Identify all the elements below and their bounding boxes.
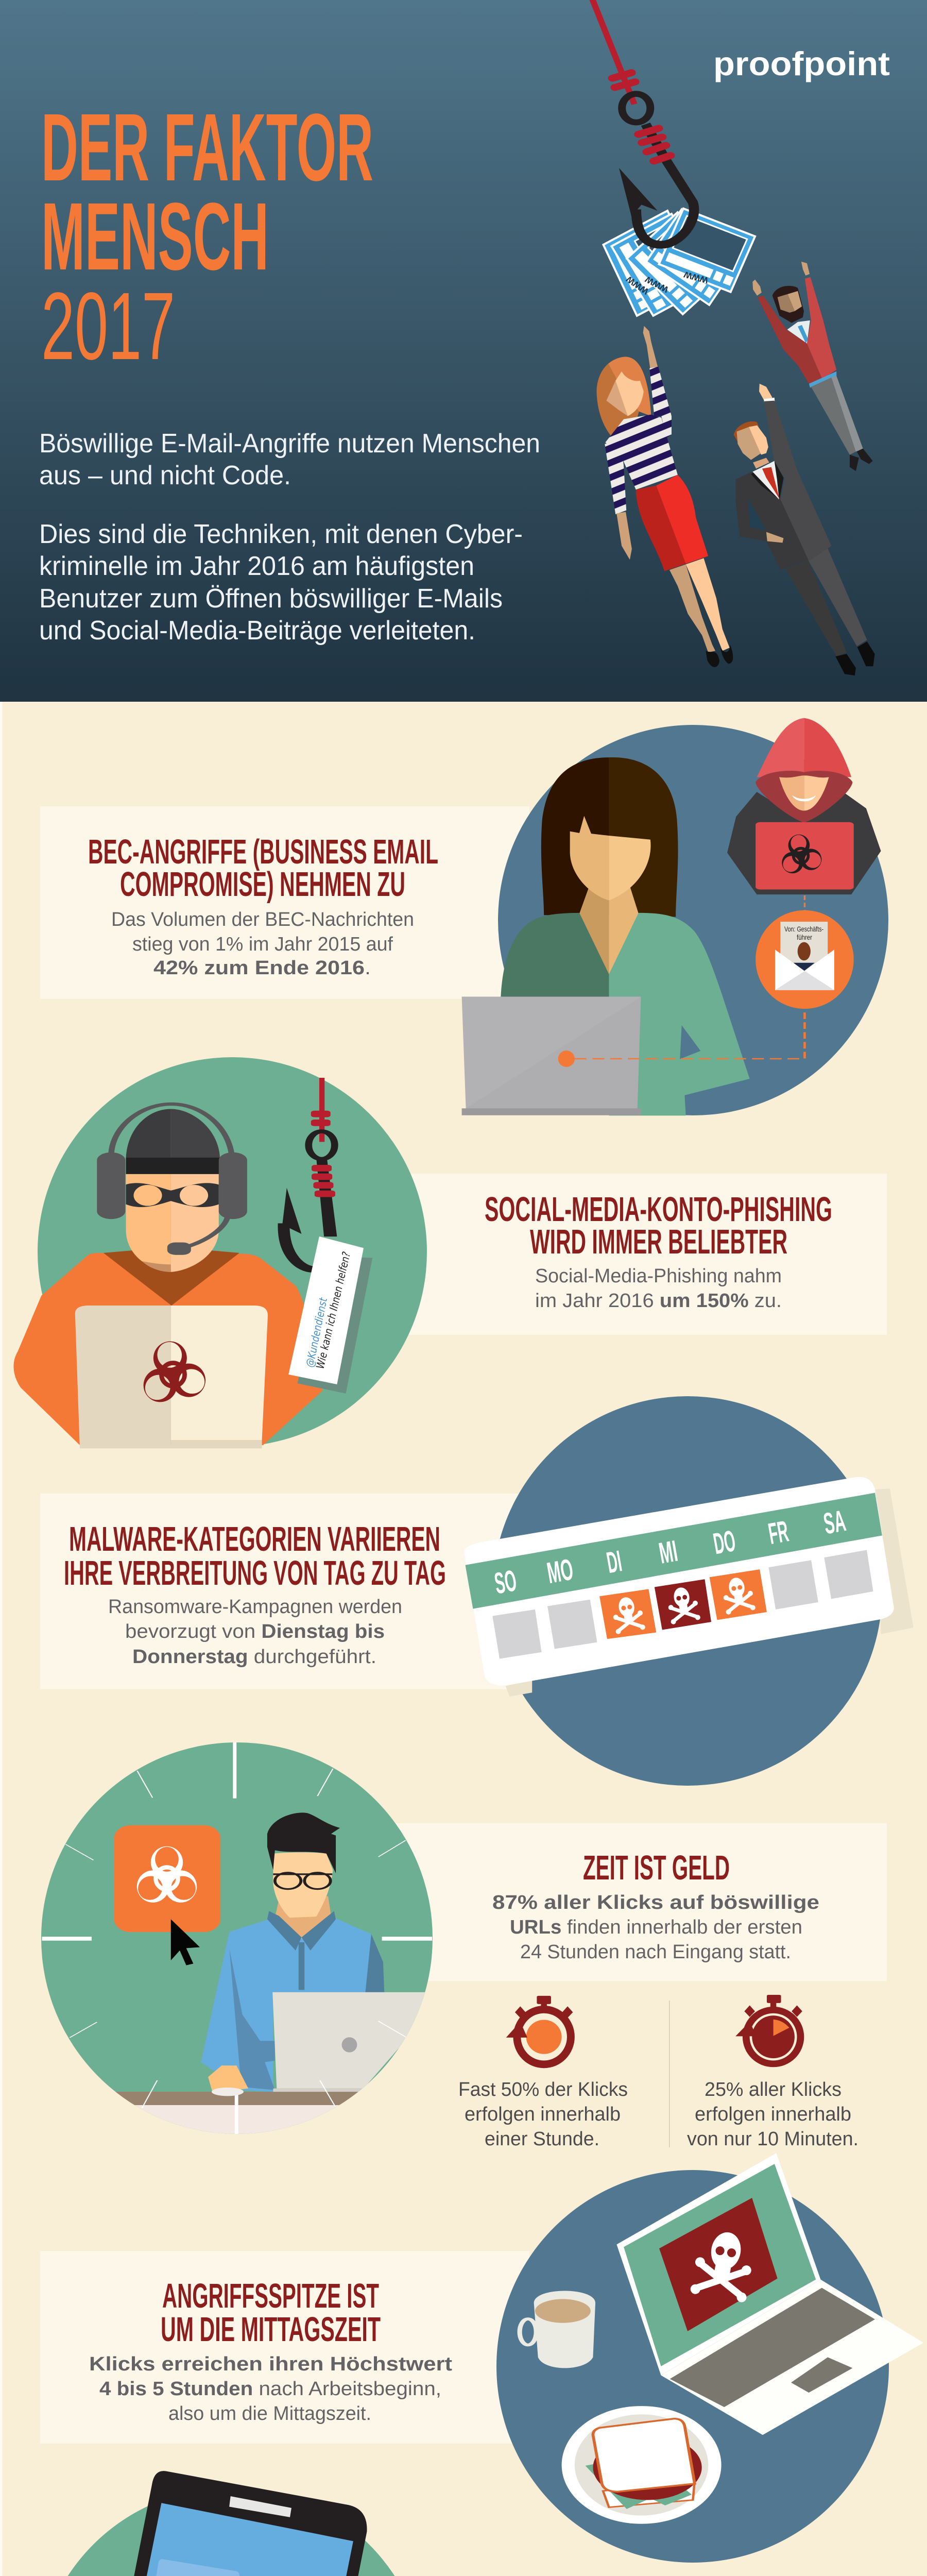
laptop keyboard bbox=[661, 2280, 923, 2435]
header background bbox=[0, 0, 927, 702]
text: social media body: Social-Media-Phishing nahm bbox=[535, 1265, 782, 1287]
panel: malware text box bbox=[40, 1494, 529, 1689]
hacker body bbox=[13, 1253, 322, 1445]
illustration: man clicking at desk bbox=[41, 1742, 433, 2136]
app tiles bbox=[129, 2563, 327, 2576]
blue circle: BEC bbox=[498, 725, 888, 1115]
text: malware body: Ransomware-Kampagnen werden bbox=[108, 1596, 402, 1618]
icon: stopwatch 2 bbox=[735, 1995, 804, 2067]
intro text: aus – und nicht Code. bbox=[39, 461, 291, 490]
text: stopwatch 2: 25% aller Klicks bbox=[705, 2079, 842, 2100]
text: lunch body: also um die Mittagszeit. bbox=[168, 2403, 371, 2425]
heading: BEC bbox=[88, 833, 438, 904]
icon: fish hook with web page cards: WWW bbox=[624, 274, 650, 296]
illustration: masked hacker with headset and hook bbox=[13, 1078, 372, 1448]
text: BEC body bbox=[111, 909, 414, 979]
tag text: Wie kann ich Ihnen helfen? bbox=[314, 1251, 353, 1370]
intro text: kriminelle im Jahr 2016 am häufigsten bbox=[39, 551, 474, 581]
laptop bbox=[75, 1306, 268, 1448]
text: BEC body: stieg von 1% im Jahr 2015 auf bbox=[132, 934, 393, 955]
malware app icon bbox=[114, 1825, 220, 1932]
text: stopwatch 2 bbox=[687, 2079, 859, 2150]
text: time body: URLs finden innerhalb der ersten bbox=[510, 1917, 802, 1938]
icon: fish hook with web page cards: WWW bbox=[682, 269, 709, 285]
heading: Zeit ist Geld: ZEIT IST GELD bbox=[583, 1849, 730, 1887]
weekday labels: MO bbox=[544, 1552, 576, 1590]
blue circle: lunch bbox=[496, 2170, 889, 2563]
text: malware body: bevorzugt von Dienstag bis bbox=[125, 1621, 385, 1642]
text: lunch body: Klicks erreichen ihren Höchstwert bbox=[89, 2353, 452, 2375]
web page cards bbox=[604, 209, 755, 316]
heading: BEC: COMPROMISE) NEHMEN ZU bbox=[120, 865, 405, 904]
text: lunch body: 4 bis 5 Stunden nach Arbeitsbeginn, bbox=[99, 2378, 441, 2400]
text: BEC body: Das Volumen der BEC-Nachrichten bbox=[111, 909, 414, 930]
tag text bbox=[303, 1251, 353, 1370]
text: BEC body: 42% zum Ende 2016 . bbox=[153, 957, 371, 979]
text: stopwatch 2: erfolgen innerhalb bbox=[695, 2104, 851, 2125]
title: DER FAKTOR bbox=[41, 94, 373, 201]
illustration: laptop, coffee and sandwich bbox=[520, 2153, 923, 2524]
dashed connector bbox=[558, 1010, 804, 1067]
intro text: und Social-Media-Beiträge verleiteten. bbox=[39, 616, 475, 646]
clock circle bbox=[41, 1742, 433, 2134]
cream page background bbox=[0, 702, 927, 2576]
icon: fish hook with web page cards: WWW bbox=[643, 274, 670, 295]
hook end bbox=[284, 1223, 372, 1394]
text: time body bbox=[492, 1892, 819, 1963]
intro text: Dies sind die Techniken, mit denen Cyber- bbox=[39, 519, 523, 549]
email envelope medallion bbox=[756, 895, 854, 1009]
panel: time text box bbox=[390, 1823, 887, 1981]
text: stopwatch 1: einer Stunde. bbox=[485, 2128, 599, 2150]
illustration: woman with laptop and hacker: führer bbox=[797, 933, 812, 941]
heading: BEC: BEC-ANGRIFFE (BUSINESS EMAIL bbox=[88, 833, 438, 871]
text: time body: 87% aller Klicks auf böswillige bbox=[492, 1892, 819, 1913]
text: social media body bbox=[535, 1265, 782, 1312]
text: stopwatch 1: erfolgen innerhalb bbox=[465, 2104, 621, 2125]
intro text: Böswillige E-Mail-Angriffe nutzen Menschen bbox=[39, 429, 540, 459]
weekday labels: SO bbox=[492, 1564, 519, 1600]
heading: malware bbox=[64, 1520, 446, 1592]
icon: stopwatch 1 bbox=[506, 1996, 575, 2068]
tag text: @Kundendienst bbox=[303, 1296, 330, 1368]
green circle: apps bbox=[36, 2487, 426, 2576]
weekday labels: DO bbox=[711, 1524, 738, 1561]
panel: social media text box bbox=[402, 1174, 887, 1335]
cursor bbox=[171, 1919, 200, 1965]
man bbox=[201, 1812, 426, 2096]
title: 2017 bbox=[41, 273, 175, 380]
text: stopwatch 1: Fast 50% der Klicks bbox=[458, 2079, 628, 2100]
text: time body: 24 Stunden nach Eingang statt. bbox=[520, 1941, 791, 1963]
green circle: social media bbox=[38, 1057, 427, 1447]
man in red sweater bbox=[752, 262, 873, 471]
fishing hook bbox=[281, 1078, 337, 1237]
heading: social media bbox=[485, 1190, 832, 1261]
woman at laptop bbox=[462, 757, 750, 1115]
intro text: Benutzer zum Öffnen böswilliger E-Mails bbox=[39, 584, 503, 614]
text: stopwatch 2: von nur 10 Minuten. bbox=[687, 2128, 859, 2150]
woman bbox=[596, 326, 733, 667]
weekday labels bbox=[492, 1504, 848, 1600]
head bbox=[97, 1104, 247, 1272]
logo: proofpoint bbox=[713, 45, 890, 82]
text: stopwatch 1 bbox=[458, 2079, 628, 2150]
weekday labels: MI bbox=[657, 1534, 680, 1570]
icon: fish hook with web page cards bbox=[590, 0, 755, 316]
heading: lunch bbox=[161, 2277, 381, 2349]
hacker bbox=[727, 718, 881, 894]
sandwich on plate bbox=[562, 2406, 722, 2524]
calendar bbox=[464, 1477, 914, 1697]
illustration: woman with laptop and hacker: Von: Geschäfts- bbox=[784, 925, 823, 933]
weekday labels: DI bbox=[604, 1544, 624, 1580]
illustration: phone with fake apps bbox=[84, 2471, 367, 2576]
neck bbox=[104, 1250, 239, 1306]
blue circle: malware bbox=[493, 1396, 882, 1786]
clock ticks bbox=[42, 1742, 432, 2134]
coffee mug bbox=[520, 2291, 595, 2368]
heading: lunch: UM DIE MITTAGSZEIT bbox=[161, 2310, 381, 2349]
illustration: woman with laptop and hacker bbox=[462, 718, 881, 1115]
title: MENSCH bbox=[41, 183, 269, 290]
title bbox=[41, 94, 373, 380]
man in dark suit bbox=[734, 384, 875, 675]
text: social media body: im Jahr 2016 um 150% zu. bbox=[535, 1290, 782, 1312]
panel: BEC text box bbox=[40, 806, 529, 999]
heading: malware: IHRE VERBREITUNG VON TAG ZU TAG bbox=[64, 1554, 446, 1592]
weekday labels: SA bbox=[821, 1504, 848, 1540]
text: malware body: Donnerstag durchgeführt. bbox=[132, 1646, 376, 1668]
heading: malware: MALWARE-KATEGORIEN VARIIEREN bbox=[69, 1520, 440, 1558]
illustration: people reaching for the hook bbox=[596, 262, 875, 675]
weekday labels: FR bbox=[766, 1514, 791, 1551]
intro text bbox=[39, 429, 540, 646]
heading: lunch: ANGRIFFSSPITZE IST bbox=[162, 2277, 379, 2315]
laptop screen bbox=[616, 2153, 820, 2375]
text: malware body bbox=[108, 1596, 402, 1668]
panel: lunch text box bbox=[40, 2251, 529, 2444]
text: lunch body bbox=[89, 2353, 452, 2425]
